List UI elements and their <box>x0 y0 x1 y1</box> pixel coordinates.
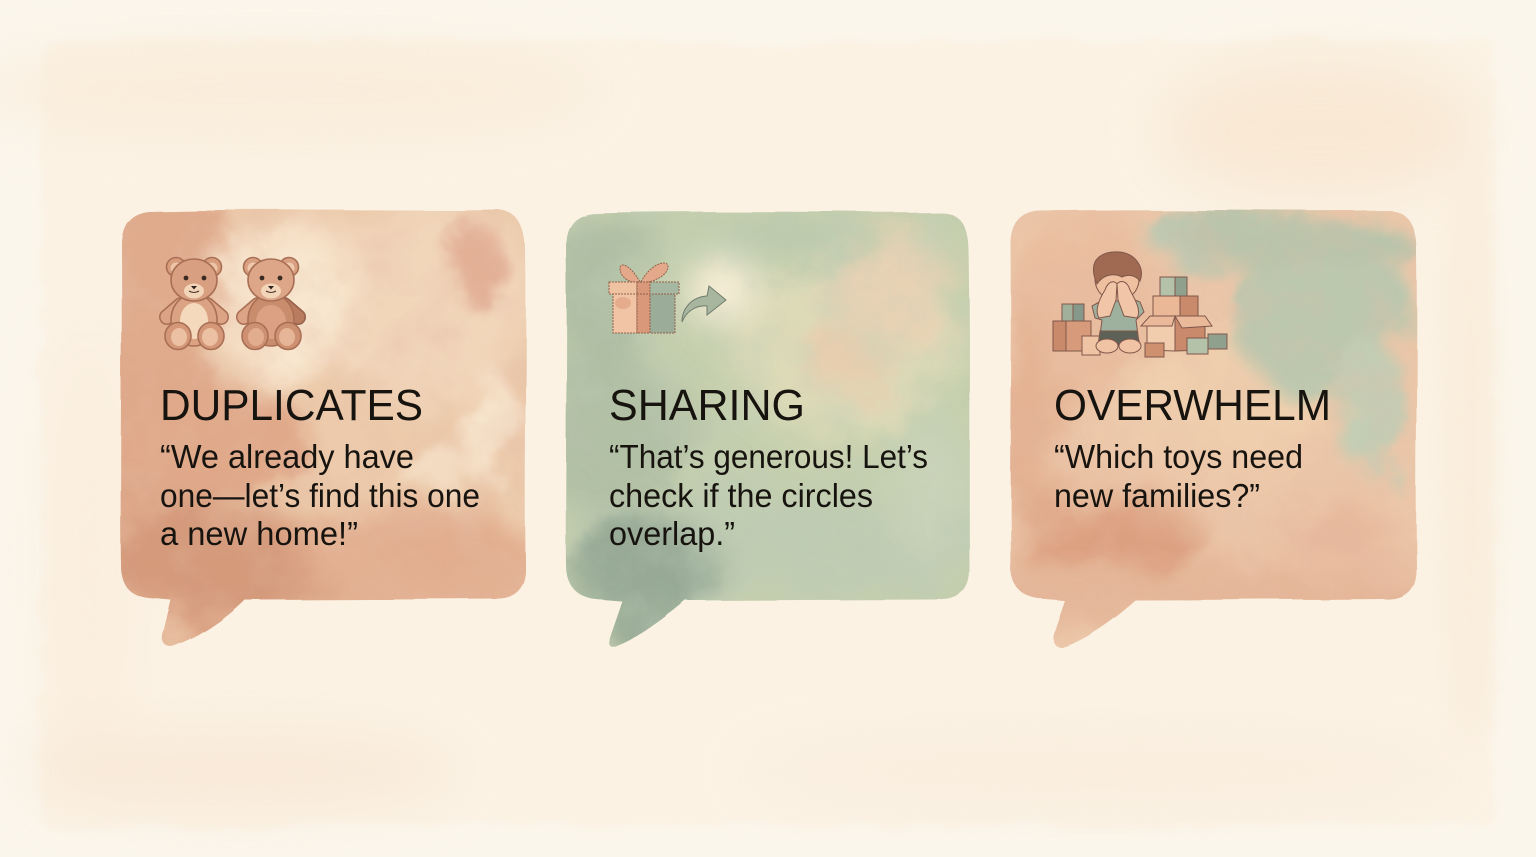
watercolor fill: terracotta and sage bubble <box>1010 209 1418 648</box>
icon: curved arrow <box>682 286 726 322</box>
icon: two teddy bears <box>165 258 301 350</box>
icon: gift box <box>609 263 679 333</box>
quote: sharing: “That’s generous! Let’s <box>609 438 928 475</box>
quote: overwhelm <box>1054 438 1303 514</box>
heading: sharing: SHARING <box>609 381 805 430</box>
panel: overwhelm speech bubble <box>1010 209 1418 648</box>
panel: sharing speech bubble <box>565 210 970 647</box>
quote: sharing: overlap.” <box>609 515 735 552</box>
panel: duplicates speech bubble <box>120 208 527 646</box>
quote: duplicates <box>160 438 480 552</box>
icon: teddy bear right <box>242 258 301 350</box>
watercolor fill: terracotta bubble <box>120 208 527 646</box>
watercolor fill: sage bubble <box>565 210 970 647</box>
icon: teddy bear left <box>165 258 224 350</box>
heading: overwhelm: OVERWHELM <box>1054 381 1331 430</box>
quote: sharing <box>609 438 928 552</box>
icon: gift box with arrow <box>609 263 726 333</box>
quote: overwhelm: new families?” <box>1054 477 1260 514</box>
quote: duplicates: “We already have <box>160 438 414 475</box>
quote: duplicates: one—let’s find this one <box>160 477 480 514</box>
icon: overwhelmed child among toys and boxes <box>1053 252 1227 357</box>
quote: overwhelm: “Which toys need <box>1054 438 1303 475</box>
icon: stacked boxes right <box>1141 277 1227 357</box>
heading: duplicates: DUPLICATES <box>160 381 423 430</box>
quote: sharing: check if the circles <box>609 477 873 514</box>
icon: stacked blocks left <box>1053 304 1100 355</box>
icon: child covering face <box>1092 252 1144 353</box>
quote: duplicates: a new home!” <box>160 515 358 552</box>
